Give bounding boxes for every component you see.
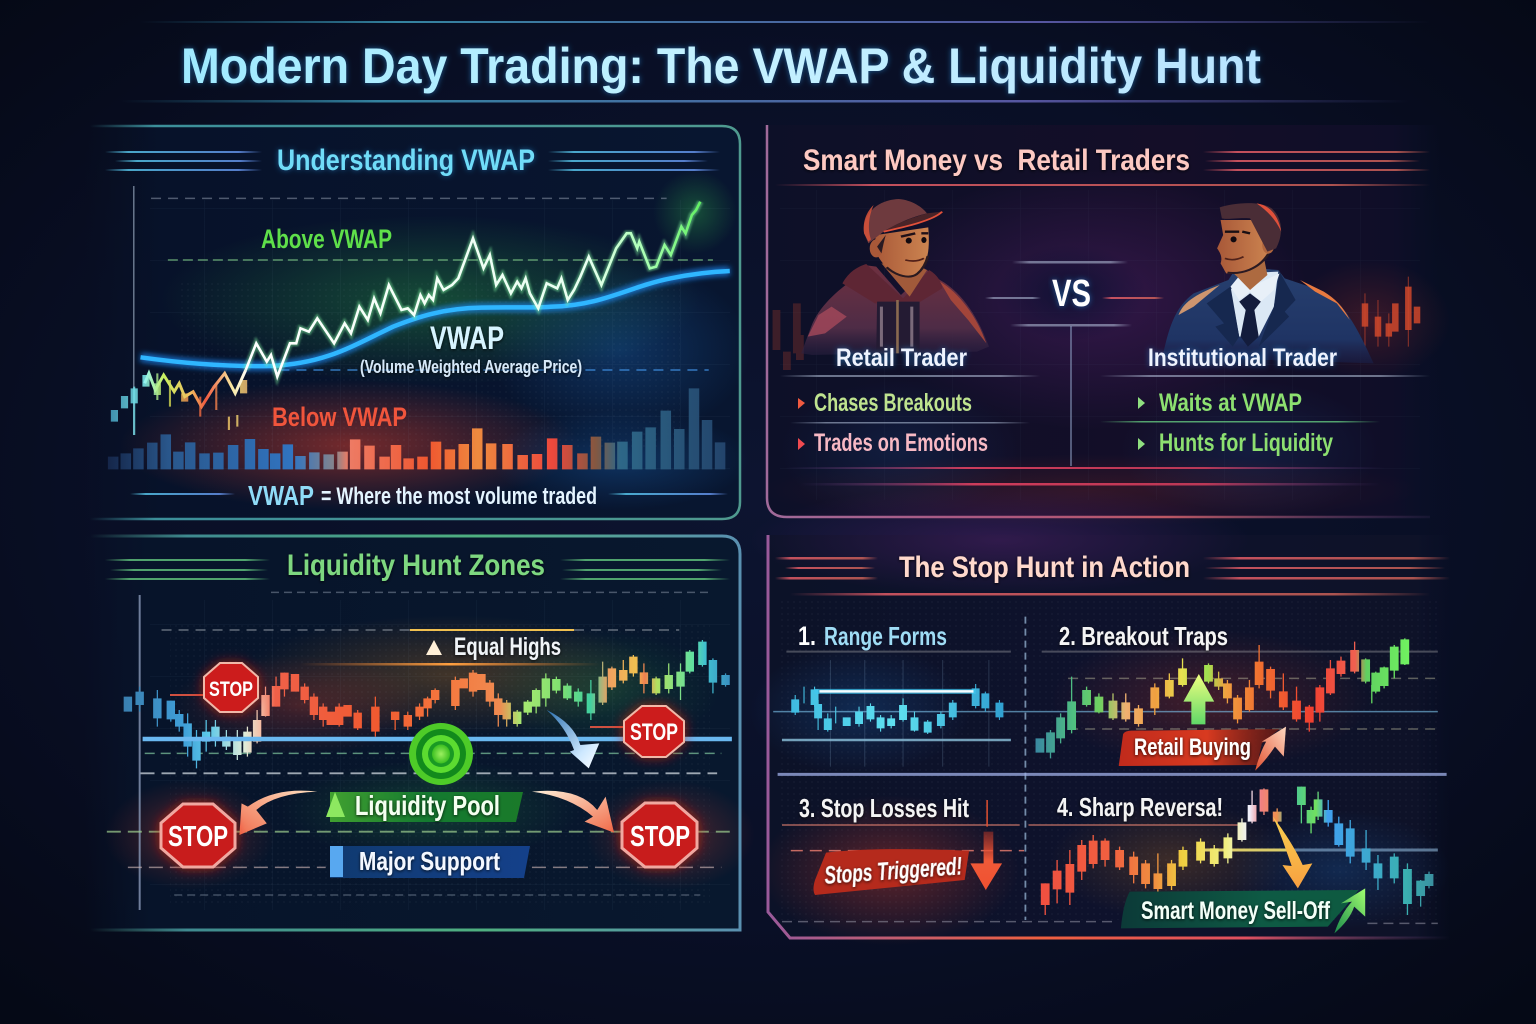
step 4 label: 4. Sharp Reversa!	[1057, 792, 1223, 822]
chart: liquidity candles	[107, 592, 732, 910]
VS badge	[985, 245, 1164, 341]
panel: stop hunt in action	[750, 485, 1450, 945]
heading rules	[105, 151, 720, 171]
arrow: stops triggered down	[970, 832, 1002, 890]
smart money sell-off label: Smart Money Sell-Off	[1141, 897, 1330, 925]
retail traits: Chases Breakouts	[814, 389, 972, 417]
header frame lines	[120, 21, 1430, 102]
panel 4 border	[768, 535, 1450, 938]
heading: liquidity hunt zones: Liquidity Hunt Zones	[287, 549, 545, 582]
charts: stop hunt candles	[795, 638, 1429, 933]
heading rules	[775, 557, 1450, 596]
range chart	[795, 684, 999, 734]
title: Modern Day Trading: The VWAP & Liquidity Hunt	[181, 38, 1261, 94]
icon: institutional trader	[1163, 203, 1374, 363]
label: VWAP: VWAP	[430, 320, 504, 356]
smart money banner	[1121, 890, 1359, 928]
panel: smart money vs retail	[760, 125, 1450, 526]
arrow: sweep down	[547, 710, 599, 768]
icon: retail trader	[801, 199, 989, 355]
heading: smart money vs retail traders: Smart Money vs Retail Traders	[803, 144, 1190, 177]
stop sign big left	[161, 804, 235, 867]
panel 4 background	[768, 535, 1450, 938]
background candles	[776, 277, 1417, 370]
price line glow	[246, 202, 700, 377]
equal highs label: Equal Highs	[454, 633, 561, 661]
liquidity pool banner: Liquidity Pool	[355, 790, 500, 821]
heading: the stop hunt in action: The Stop Hunt in Action	[899, 551, 1190, 584]
candle wicks	[140, 640, 726, 768]
panel 3 glows	[105, 600, 755, 910]
arrow: breakout up	[1183, 674, 1214, 724]
arrow: sell-off	[1273, 817, 1312, 888]
breakout chart	[1040, 638, 1405, 758]
panel 4 glows	[750, 485, 1450, 945]
panel 2 border	[767, 125, 1440, 517]
stops triggered banner	[813, 849, 969, 895]
panel 1 border	[90, 126, 740, 519]
retail buying label: Retail Buying	[1134, 734, 1251, 761]
reversal chart	[1045, 787, 1429, 915]
VS badge: VS	[1052, 273, 1091, 315]
comparison rules	[780, 375, 1430, 486]
institutional traits: Hunts for Liquidity	[1159, 429, 1333, 457]
trader names	[836, 344, 1337, 372]
panel: understanding VWAP	[85, 126, 750, 519]
stop sign small top left	[204, 663, 258, 712]
divider	[1070, 326, 1072, 466]
price line start	[145, 370, 246, 407]
support line	[143, 737, 732, 741]
stop sign big right	[622, 803, 697, 867]
chart: VWAP price and volume	[113, 186, 730, 469]
institutional traits: Waits at VWAP	[1159, 389, 1302, 417]
VWAP line	[141, 271, 730, 366]
stops triggered label: Stops Triggered!	[823, 852, 963, 890]
stop sign big left: STOP	[168, 821, 228, 853]
panel 2 background	[767, 125, 1440, 517]
candle bodies	[128, 642, 726, 761]
icon: liquidity target	[405, 720, 477, 790]
price line	[246, 202, 700, 377]
VWAP line glow	[141, 271, 730, 366]
panel: liquidity hunt zones	[85, 536, 755, 930]
step 1 label: Range Forms	[824, 621, 947, 651]
step 1 label	[798, 621, 947, 651]
VWAP definition	[130, 480, 728, 511]
label: volume weighted average price: (Volume Weighted Average Price)	[360, 357, 582, 377]
retail buying banner	[1119, 729, 1279, 766]
step 3 label: 3. Stop Losses Hit	[799, 793, 969, 823]
panel 2 glows	[760, 170, 1450, 526]
orange resistance glow line	[300, 663, 600, 666]
label: below VWAP: Below VWAP	[272, 402, 407, 432]
step 2 label: 2. Breakout Traps	[1059, 621, 1228, 651]
major support banner: Major Support	[359, 846, 500, 876]
panel 1 background	[85, 126, 740, 519]
arrow: smart money	[1334, 888, 1365, 933]
stop sign line accents	[170, 694, 626, 728]
VWAP definition: = Where the most volume traded	[321, 483, 597, 510]
stop sign mid right: STOP	[630, 719, 678, 746]
arrow: retail buying	[1255, 727, 1286, 771]
trader names: Institutional Trader	[1148, 344, 1337, 372]
retail traits: Trades on Emotions	[814, 429, 988, 457]
step 1 label: 1.	[798, 621, 816, 651]
heading rules	[105, 559, 730, 580]
step grid lines	[773, 617, 1447, 923]
VWAP definition: VWAP	[248, 480, 314, 511]
arrow: to left stop	[239, 791, 317, 835]
equal highs label	[426, 633, 561, 661]
panel 3 background	[85, 536, 740, 930]
early candles	[114, 375, 244, 422]
panel 3 border	[90, 536, 740, 930]
arrow: to right stop	[532, 791, 614, 833]
institutional traits	[1138, 389, 1333, 457]
stop sign mid right	[624, 706, 684, 757]
label: above VWAP: Above VWAP	[261, 224, 392, 254]
heading: understanding VWAP: Understanding VWAP	[277, 144, 535, 177]
volume bars	[113, 388, 720, 469]
retail traits	[798, 389, 988, 457]
trader names: Retail Trader	[836, 344, 967, 372]
heading rules	[775, 151, 1430, 186]
stop sign small top left: STOP	[209, 678, 253, 701]
stop sign big right: STOP	[630, 821, 690, 853]
panel 1 glows	[120, 170, 750, 510]
